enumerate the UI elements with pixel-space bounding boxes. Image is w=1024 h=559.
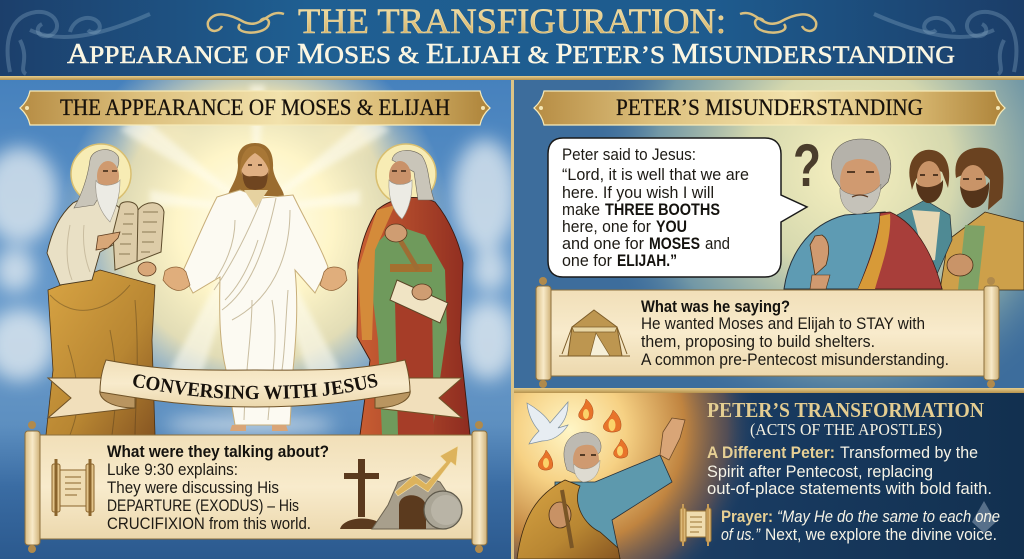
text: what was he saying: He wanted Moses and Elijah to STAY with [641, 315, 925, 333]
light glow [55, 80, 455, 420]
heading plate: the appearance of Moses and Elijah: THE APPEARANCE OF MOSES & ELIJAH [60, 95, 450, 120]
hands [163, 267, 190, 290]
icon: upward arrow [395, 446, 458, 496]
sky clouds [0, 119, 517, 434]
text: a different Peter [707, 444, 992, 498]
text: what were they talking about: CRUCIFIXION from this world. [107, 515, 311, 533]
speech bubble: Peter said to Jesus: [562, 146, 696, 164]
ribbon: Conversing with Jesus [46, 359, 464, 419]
scroll: what was he saying [536, 277, 999, 388]
figure: Elijah with scroll [357, 144, 470, 435]
text: what were they talking about: They were discussing His [107, 479, 279, 497]
icon: prayer scroll [680, 504, 711, 546]
speech bubble: “Lord, it is well that we are [562, 166, 749, 184]
speech bubble: and one for [562, 235, 644, 253]
speech bubble: here, one for [562, 218, 651, 236]
text: what was he saying [641, 298, 949, 369]
title line 1: THE TRANSFIGURATION: [298, 1, 726, 41]
text: a different Peter: Spirit after Pentecost, replacing [707, 463, 933, 481]
figure: Peter preaching [517, 418, 685, 559]
speech bubble: one for [562, 252, 612, 270]
icon: small scroll [52, 459, 94, 516]
panel: Peter's misunderstanding [514, 80, 1024, 559]
heading plate: Peter's misunderstanding [534, 91, 1005, 125]
speech bubble: make [562, 201, 600, 219]
ornament: top-right corner scroll [874, 12, 1016, 74]
ornament: top-left corner scroll [8, 12, 150, 74]
scroll: what were they talking about [25, 421, 487, 553]
heading: Peter's transformation: PETER’S TRANSFORMATION [707, 398, 984, 422]
figure: companion middle [897, 150, 952, 290]
text: what were they talking about [107, 443, 329, 533]
text: a different Peter: Transformed by the [840, 444, 978, 462]
ornament: title flourish right [740, 13, 816, 33]
icon: tent [559, 310, 630, 356]
sparkle [972, 501, 996, 533]
text: what was he saying: them, proposing to build shelters. [641, 333, 875, 351]
figure: companion right [940, 148, 1024, 290]
text: what were they talking about: Luke 9:30 explains: [107, 461, 238, 479]
heading plate: the appearance of Moses and Elijah [20, 91, 490, 125]
title line 2: APPEARANCE OF MOSES & ELIJAH & PETER’S MISUNDERSTANDING [67, 39, 955, 70]
speech bubble: and [705, 235, 730, 253]
gold horizontal divider [514, 388, 1024, 393]
icon: flames [538, 399, 628, 470]
speech bubble: here. If you wish I will [562, 184, 714, 202]
text: prayer: of us.” [721, 526, 761, 544]
speech bubble [548, 138, 807, 277]
text: what was he saying: What was he saying? [641, 298, 790, 316]
figure: Jesus [163, 143, 347, 431]
speech bubble: MOSES [649, 235, 700, 253]
figure: Peter questioning [784, 139, 942, 289]
text: prayer [721, 508, 1000, 544]
gold vertical divider [511, 80, 514, 559]
speech bubble: YOU [656, 218, 687, 236]
text: what was he saying: A common pre-Pentecost misunderstanding. [641, 351, 949, 369]
icon: dove [527, 402, 568, 444]
text: prayer: Next, we explore the divine voice. [765, 526, 997, 544]
panel: Peter's transformation [514, 393, 1024, 559]
header band [0, 0, 1024, 80]
heading: Peter's transformation: (ACTS OF THE APOSTLES) [750, 420, 942, 439]
icon: cross and empty tomb [340, 446, 462, 529]
speech bubble: ELIJAH.” [617, 252, 677, 270]
text: a different Peter: A Different Peter: [707, 444, 835, 462]
text: what were they talking about: What were they talking about? [107, 443, 329, 461]
icon: question mark: ? [793, 132, 821, 199]
text: what were they talking about: DEPARTURE (EXODUS) – His [107, 497, 299, 515]
ribbon: Conversing with Jesus: CONVERSING WITH JESUS [133, 374, 378, 400]
heading: Peter's transformation [707, 398, 984, 439]
text: prayer: “May He do the same to each one [777, 508, 1000, 526]
text: prayer: Prayer: [721, 508, 773, 526]
text: a different Peter: out-of-place statements with bold faith. [707, 480, 992, 498]
speech bubble: THREE BOOTHS [605, 201, 720, 219]
heading plate: Peter's misunderstanding: PETER’S MISUNDERSTANDING [616, 95, 923, 120]
figure: Moses with tablets [46, 144, 164, 435]
ornament: title flourish left [208, 13, 284, 33]
